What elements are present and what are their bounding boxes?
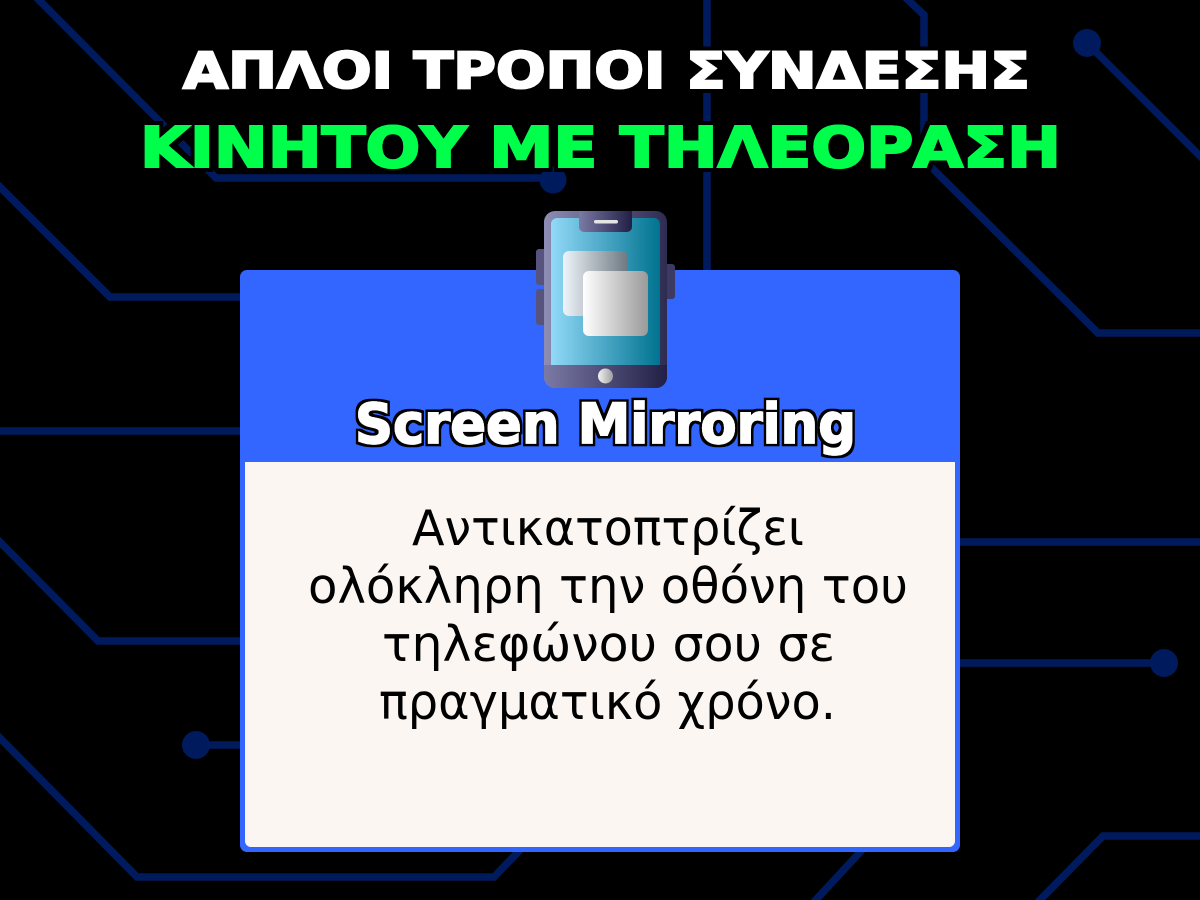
icon: phone with mirrored screens: [536, 211, 675, 388]
panel: screen mirroring card: [240, 211, 960, 852]
card description: τηλεφώνου σου σε: [382, 616, 835, 673]
card description: ολόκληρη την οθόνη του: [308, 558, 908, 615]
title line 2: ΚΙΝΗΤΟΥ ΜΕ ΤΗΛΕΟΡΑΣΗ: [140, 116, 1061, 181]
card description: [308, 500, 908, 731]
title line 1: ΑΠΛΟΙ ΤΡΟΠΟΙ ΣΥΝΔΕΣΗΣ: [183, 42, 1030, 100]
card frame: [240, 270, 960, 852]
title: [140, 42, 1061, 181]
card description: πραγματικό χρόνο.: [379, 674, 836, 731]
card description: Αντικατοπτρίζει: [412, 500, 804, 557]
card body: [245, 462, 955, 847]
card heading: Screen Mirroring: [355, 392, 856, 456]
